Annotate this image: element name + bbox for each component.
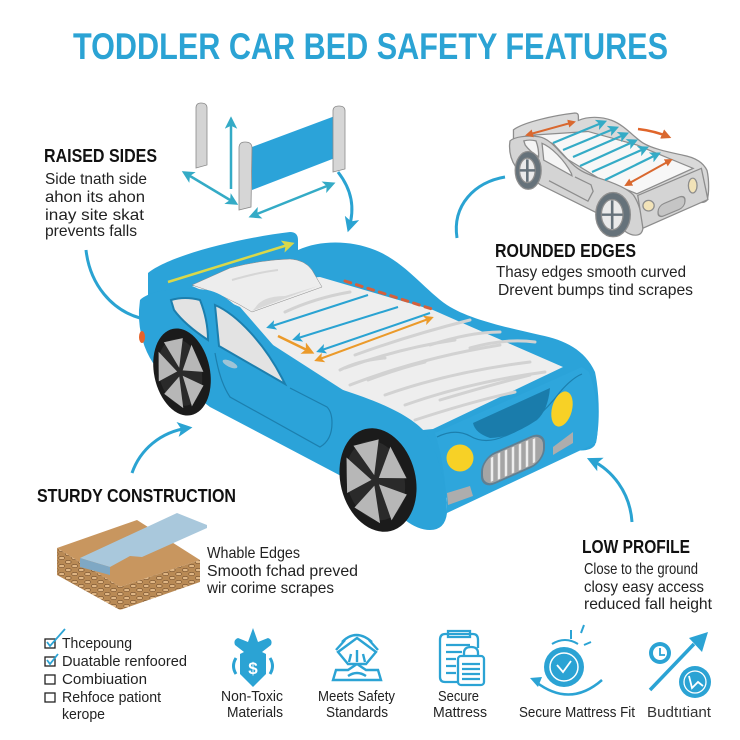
text: rounded edges: Drevent bumps tind scrapes — [498, 282, 693, 299]
label: secure mattress — [433, 689, 487, 721]
text: raised sides: Side tnath side — [45, 171, 147, 188]
label: non-toxic: Materials — [227, 705, 283, 721]
label: secure mattress: Mattress — [433, 705, 487, 721]
text: raised sides: inay site skat — [45, 207, 145, 224]
hood scoop — [473, 388, 550, 438]
checklist — [45, 629, 187, 723]
label: non-toxic: Non-Toxic — [221, 689, 283, 705]
grille — [482, 431, 544, 489]
text: sturdy construction body: wir corime scrapes — [206, 580, 334, 597]
mattress folds — [285, 292, 545, 420]
checklist: kerope — [62, 706, 105, 723]
arrow: rounded edges arc — [456, 177, 505, 238]
text: sturdy construction body: Smooth fchad preved — [207, 563, 358, 580]
illustration: blue car bed — [139, 232, 599, 540]
icon: secure mattress — [440, 631, 484, 685]
label: secure mattress fit: Secure Mattress Fit — [519, 705, 635, 721]
text: low profile: Close to the ground — [584, 561, 698, 578]
arrow: rail to car — [338, 172, 352, 228]
tail light — [139, 331, 145, 343]
text: raised sides: RAISED SIDES — [44, 146, 157, 166]
mattress — [192, 277, 563, 430]
illustration: small grey car — [510, 113, 709, 237]
side window — [215, 305, 285, 384]
front face — [435, 367, 598, 513]
rear wheel — [146, 323, 218, 421]
far panel and headboard — [148, 232, 599, 500]
text: sturdy construction heading: STURDY CONSTRUCTION — [37, 486, 236, 506]
checklist: Rehfoce pationt — [62, 689, 162, 706]
label: safety standards: Meets Safety — [318, 689, 396, 705]
text: low profile: closy easy access — [584, 579, 704, 596]
illustration: material cross-section — [57, 513, 207, 610]
near side panel — [139, 288, 447, 530]
rear window — [171, 298, 208, 340]
icon: secure fit clock — [530, 625, 602, 695]
headlights — [446, 389, 576, 472]
door outline — [215, 353, 332, 447]
safety arrows on mattress — [168, 244, 435, 360]
text: raised sides: ahon its ahon — [45, 189, 145, 206]
front wheel — [329, 420, 427, 540]
icon: non-toxic: $ — [248, 659, 258, 678]
text: low profile: reduced fall height — [584, 596, 713, 613]
text: low profile — [582, 537, 713, 613]
text: low profile: LOW PROFILE — [582, 537, 690, 557]
bumper lights — [447, 432, 573, 505]
checklist: Duatable renfoored — [62, 653, 187, 670]
checklist: Combiuation — [62, 671, 147, 688]
label: safety standards — [318, 689, 396, 721]
text: raised sides — [44, 146, 157, 240]
text: raised sides: prevents falls — [45, 223, 137, 240]
arrow: sturdy construction to car — [132, 428, 188, 473]
door handle — [221, 358, 239, 370]
text: rounded edges: ROUNDED EDGES — [495, 241, 636, 261]
text: rounded edges: Thasy edges smooth curved — [496, 264, 686, 281]
label: safety standards: Standards — [326, 705, 388, 721]
icon: safety standards — [333, 635, 381, 680]
pillow — [192, 259, 322, 312]
text: sturdy construction body: Whable Edges — [207, 545, 300, 562]
label: budget: Budtıtiant — [647, 705, 711, 721]
label: secure mattress: Secure — [438, 689, 479, 705]
arrow: raised sides to car — [86, 250, 140, 318]
text: rounded edges — [495, 241, 693, 299]
checklist: Thcepoung — [62, 635, 132, 652]
text: sturdy construction body — [206, 545, 358, 597]
label: non-toxic — [221, 689, 283, 721]
icon: budget — [649, 632, 711, 698]
icon: raised side rail diagram — [185, 103, 345, 216]
icon: non-toxic — [234, 628, 272, 687]
arrow: low profile to car — [591, 460, 632, 522]
